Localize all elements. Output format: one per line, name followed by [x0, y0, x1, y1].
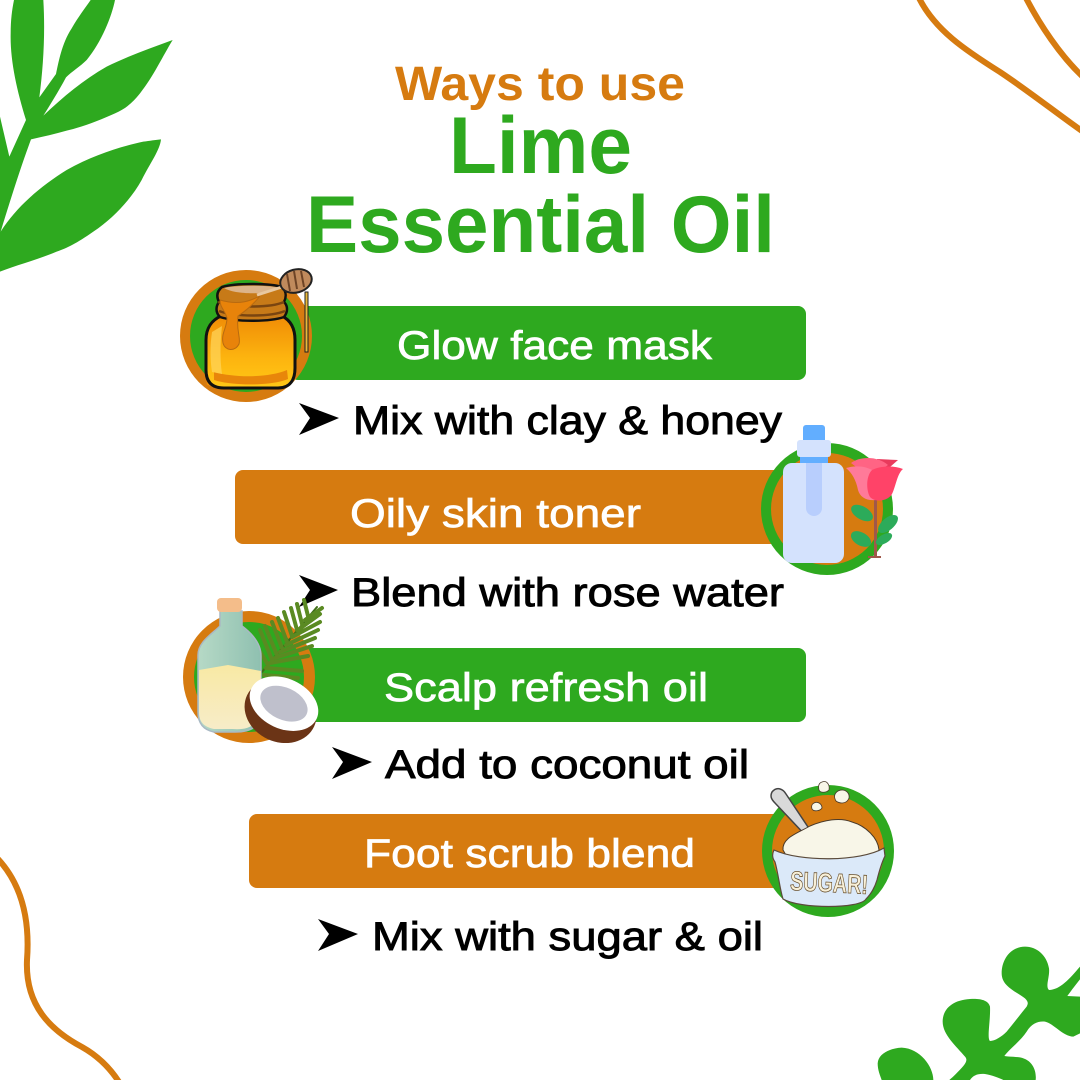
bar label 3: Scalp refresh oil [384, 666, 708, 710]
bar label 1: Glow face mask [397, 324, 713, 368]
sub text 3 [332, 743, 749, 787]
arrow [299, 403, 339, 435]
item 4: Foot scrub blend [249, 782, 894, 917]
title line: Ways to use: Ways to use [395, 58, 685, 111]
green bar 3 [290, 648, 806, 722]
sub text 1 [299, 399, 782, 443]
sub text 2 [299, 571, 784, 615]
decoration: orange curve bottom left [0, 859, 119, 1080]
arrow [332, 747, 372, 779]
title [306, 58, 775, 270]
icon: honey jar in circle [180, 266, 314, 402]
instruction: Blend with rose water [351, 571, 784, 615]
instruction: Mix with sugar & oil [372, 915, 763, 959]
bar label 4: Foot scrub blend [364, 832, 695, 876]
icon: sugar bowl in circle [762, 782, 894, 917]
arrow [299, 575, 338, 607]
instruction: Add to coconut oil [385, 743, 749, 787]
item 1: Glow face mask [180, 266, 806, 402]
bowl label: SUGAR! [789, 866, 869, 900]
green bar 1 [290, 306, 806, 380]
decoration: orange curves top right [919, 0, 1080, 131]
arrow [318, 919, 358, 951]
instruction: Mix with clay & honey [353, 399, 782, 443]
item 2: Oily skin toner [235, 425, 903, 575]
title line: Lime: Lime [449, 101, 632, 191]
icon: oil bottle, palm and coconut in circle [183, 598, 328, 755]
title line: Essential Oil: Essential Oil [306, 180, 775, 270]
orange bar 4 [249, 814, 790, 888]
sub text 4 [318, 915, 763, 959]
decoration: green leaves top left [0, 0, 173, 272]
item 3: Scalp refresh oil [183, 598, 806, 755]
bar label 2: Oily skin toner [350, 492, 641, 536]
orange bar 2 [235, 470, 800, 544]
decoration: green leaves bottom right [878, 947, 1080, 1080]
icon: dropper bottle and rose in circle [761, 425, 903, 575]
